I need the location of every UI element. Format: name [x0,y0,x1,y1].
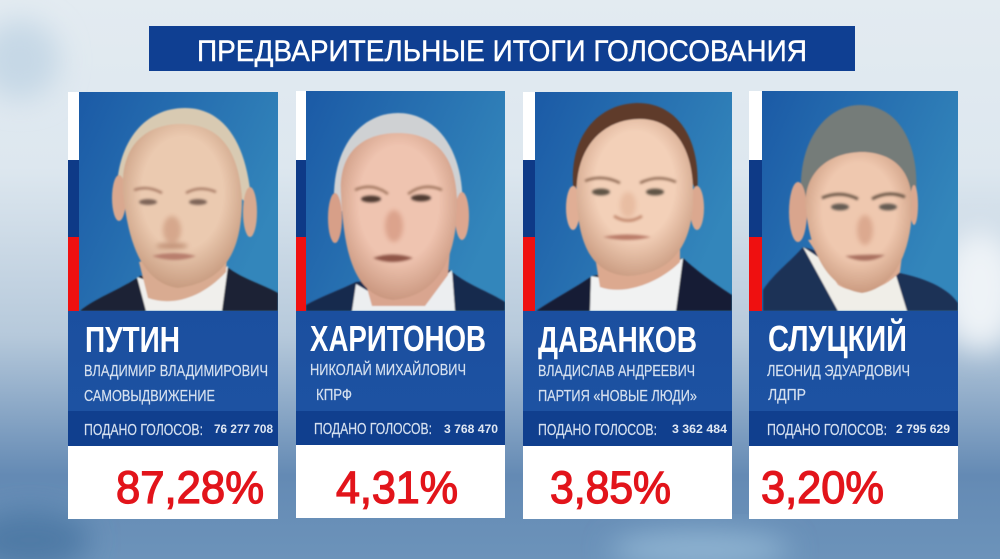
party: ПАРТИЯ «НОВЫЕ ЛЮДИ» [538,388,697,405]
percentage [749,446,958,519]
info block [523,311,732,446]
percentage [523,446,732,519]
votes label: ПОДАНО ГОЛОСОВ: [538,422,657,439]
portrait: Kharitonov [306,91,505,311]
title bar [149,26,855,71]
title: ПРЕДВАРИТЕЛЬНЫЕ ИТОГИ ГОЛОСОВАНИЯ [197,35,807,68]
votes count: 76 277 708 [214,424,274,436]
votes count: 2 795 629 [896,424,950,436]
percentage: 87,28% [116,462,264,513]
party: КПРФ [316,387,352,404]
votes count: 3 768 470 [444,424,498,436]
info block [296,311,505,445]
given name: НИКОЛАЙ МИХАЙЛОВИЧ [310,360,466,379]
party: ЛДПР [768,387,806,404]
surname: ДАВАНКОВ [538,319,697,360]
percentage: 3,20% [761,462,884,513]
info block [68,311,278,446]
percentage: 3,85% [550,462,671,513]
panel: Kharitonov [296,91,505,518]
given name: ВЛАДИСЛАВ АНДРЕЕВИЧ [538,363,695,380]
votes label: ПОДАНО ГОЛОСОВ: [84,422,203,439]
panel: Davankov [523,92,732,519]
percentage: 4,31% [336,462,458,513]
surname: СЛУЦКИЙ [768,317,907,359]
given name: ЛЕОНИД ЭДУАРДОВИЧ [767,363,910,380]
party: САМОВЫДВИЖЕНИЕ [84,388,215,405]
panel: Slutsky [749,91,958,519]
info block [749,311,958,446]
surname: ХАРИТОНОВ [310,318,486,359]
percentage [68,446,278,519]
panel: Putin [68,92,278,519]
votes label: ПОДАНО ГОЛОСОВ: [767,422,887,439]
portrait: Davankov [535,92,732,311]
portrait: Slutsky [762,91,958,311]
portrait: Putin [79,92,278,311]
flag stripe [749,91,762,311]
votes count: 3 362 484 [672,424,728,436]
given name: ВЛАДИМИР ВЛАДИМИРОВИЧ [84,363,268,380]
percentage [296,445,505,518]
flag stripe [68,92,79,311]
votes label: ПОДАНО ГОЛОСОВ: [314,421,432,438]
flag stripe [296,91,306,311]
flag stripe [523,92,535,311]
surname: ПУТИН [85,319,180,360]
